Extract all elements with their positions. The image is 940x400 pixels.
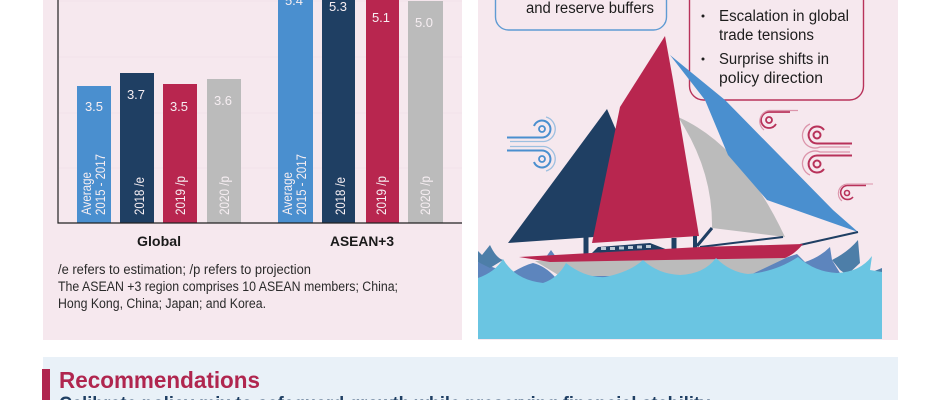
rotated period labels: 2019 /p xyxy=(173,176,188,215)
rotated period labels: 2020 /p xyxy=(418,176,433,215)
rotated period labels: Average xyxy=(280,172,295,215)
icon: red wind swirls xyxy=(760,110,873,201)
bar value labels xyxy=(85,0,433,114)
cabin xyxy=(592,243,668,253)
icon: blue wind swirls xyxy=(507,117,555,171)
footnote: The ASEAN +3 region comprises 10 ASEAN members; China; xyxy=(58,279,398,294)
rotated period labels xyxy=(79,154,433,215)
masts and rigging xyxy=(586,228,858,254)
bar value labels: 5.1 xyxy=(372,10,390,25)
rotated period labels: Average xyxy=(79,172,94,215)
icon: front wave sea xyxy=(478,256,882,339)
accent bar xyxy=(42,369,50,400)
callout: buffers xyxy=(496,0,666,30)
rotated period labels: 2015 - 2017 xyxy=(294,154,309,215)
icon: back waves xyxy=(478,240,882,290)
group labels: ASEAN+3 xyxy=(330,233,394,249)
footnote xyxy=(58,262,398,311)
footnote: Hong Kong, China; Japan; and Korea. xyxy=(58,296,266,311)
hull xyxy=(519,244,803,262)
callout: risks: Escalation in global xyxy=(719,8,849,25)
callout: risks: trade tensions xyxy=(719,27,814,44)
bar value labels: 3.6 xyxy=(214,93,232,108)
axes xyxy=(58,0,462,223)
callout: risks: policy direction xyxy=(719,70,823,87)
bar value labels: 3.7 xyxy=(127,87,145,102)
navy sail xyxy=(508,109,616,243)
icon: sailboat xyxy=(508,36,858,276)
footnote: /e refers to estimation; /p refers to projection xyxy=(58,262,311,277)
rotated period labels: 2015 - 2017 xyxy=(93,154,108,215)
rotated period labels: 2018 /e xyxy=(333,177,348,215)
bar value labels: 3.5 xyxy=(170,99,188,114)
rotated period labels: 2020 /p xyxy=(217,176,232,215)
heading: Recommendations xyxy=(59,367,260,393)
callout: buffers: and reserve buffers xyxy=(526,0,654,17)
panel: sailing boat illustration xyxy=(478,0,898,340)
bars: ASEAN+3 xyxy=(278,0,443,223)
panel: growth chart xyxy=(43,0,462,340)
group labels xyxy=(137,233,394,249)
blue sail xyxy=(670,55,858,232)
bars: Global xyxy=(77,73,241,223)
grey sail xyxy=(678,117,785,237)
bar value labels: 3.5 xyxy=(85,99,103,114)
panel: recommendations xyxy=(42,357,898,400)
hull underside xyxy=(535,257,788,276)
rotated period labels: 2018 /e xyxy=(132,177,147,215)
group labels: Global xyxy=(137,233,181,249)
callout: risks xyxy=(690,0,864,100)
bar value labels: 5.0 xyxy=(415,15,433,30)
crimson sail xyxy=(592,36,699,243)
bar chart xyxy=(58,0,462,249)
rotated period labels: 2019 /p xyxy=(374,176,389,215)
callout: risks: Surprise shifts in xyxy=(719,51,829,68)
